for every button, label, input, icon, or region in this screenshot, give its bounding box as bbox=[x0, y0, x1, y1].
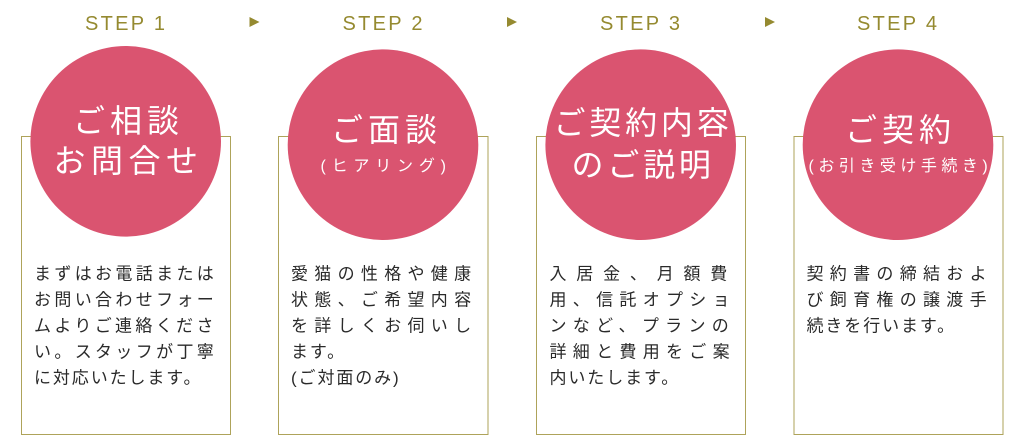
step 2 description: を詳しくお伺いし bbox=[291, 316, 477, 336]
arrow: step 3 to 4 bbox=[765, 17, 775, 27]
step 3 heading bbox=[554, 105, 733, 183]
step 1 description: ムよりご連絡くださ bbox=[34, 316, 217, 336]
step 1 description: まずはお電話または bbox=[34, 264, 217, 284]
step 4 text box bbox=[794, 136, 1003, 434]
step 2 heading: (ヒアリング) bbox=[320, 157, 452, 175]
step 2 description bbox=[291, 264, 477, 388]
arrow: step 2 to 3 bbox=[507, 17, 517, 27]
step 4 description: 続きを行います。 bbox=[806, 316, 956, 336]
step 2 description: 愛猫の性格や健康 bbox=[291, 264, 477, 284]
step 2 heading bbox=[320, 112, 452, 175]
panel: step 1 bbox=[22, 13, 230, 434]
step 4 description bbox=[806, 264, 993, 336]
step 1 heading: お問合せ bbox=[54, 143, 204, 179]
panel: step 3 bbox=[536, 13, 746, 434]
step 1 description: お問い合わせフォー bbox=[34, 290, 217, 310]
step 3 description: 用、信託オプショ bbox=[550, 290, 736, 310]
step 3 description bbox=[550, 264, 737, 388]
step 3 text box bbox=[536, 136, 746, 434]
step 4 description: び飼育権の譲渡手 bbox=[806, 290, 993, 310]
panel: step 4 bbox=[794, 13, 1003, 434]
step 4 heading: (お引き受け手続き) bbox=[808, 157, 992, 175]
step 2 circle bbox=[288, 49, 478, 240]
step 2 description: ます。 bbox=[291, 342, 346, 362]
step 2 heading: ご面談 bbox=[331, 112, 442, 148]
step 1 description: に対応いたします。 bbox=[34, 368, 202, 388]
step 3 heading: ご契約内容 bbox=[554, 105, 733, 141]
step 1 heading bbox=[54, 103, 204, 179]
step 1 description bbox=[34, 264, 217, 388]
step 3 description: ンなど、プランの bbox=[550, 316, 735, 336]
step 3 circle bbox=[545, 49, 736, 240]
step 2 description: (ご対面のみ) bbox=[291, 368, 401, 388]
arrow: step 1 to 2 bbox=[250, 17, 260, 27]
step 3 description: 内いたします。 bbox=[550, 368, 680, 388]
step 2 text box bbox=[278, 136, 488, 434]
step 4 description: 契約書の締結およ bbox=[806, 264, 993, 284]
step 1 label: STEP 1 bbox=[85, 13, 167, 35]
step 3 description: 詳細と費用をご案 bbox=[550, 342, 736, 362]
panel: step 2 bbox=[278, 13, 488, 434]
step 3 heading: のご説明 bbox=[572, 147, 715, 183]
step 4 label: STEP 4 bbox=[857, 13, 939, 35]
step 1 heading: ご相談 bbox=[73, 103, 184, 139]
step 3 description: 入居金、月額費 bbox=[550, 264, 737, 284]
step 2 description: 状態、ご希望内容 bbox=[291, 290, 477, 310]
step 4 heading bbox=[808, 112, 992, 175]
step 1 circle bbox=[30, 46, 221, 237]
step 3 label: STEP 3 bbox=[600, 13, 682, 35]
step 4 heading: ご契約 bbox=[845, 112, 956, 148]
step 2 label: STEP 2 bbox=[342, 13, 425, 35]
step 4 circle bbox=[803, 49, 993, 240]
step 1 text box bbox=[22, 136, 230, 434]
step 1 description: い。スタッフが丁寧 bbox=[34, 342, 217, 362]
